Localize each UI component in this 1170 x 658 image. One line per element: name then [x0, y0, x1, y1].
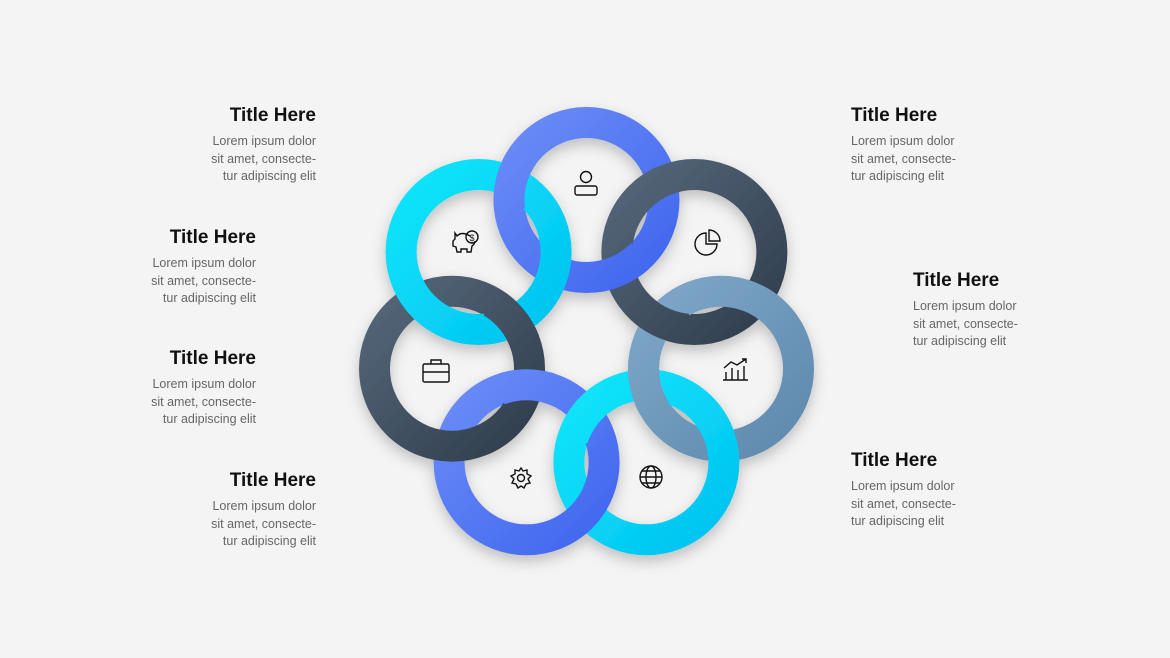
text block: right 2: sit amet, consecte- — [913, 317, 1018, 331]
icon: globe — [640, 466, 662, 488]
text block: left 1: Lorem ipsum dolor — [212, 134, 316, 148]
text block: left 3: sit amet, consecte- — [151, 395, 256, 409]
text block: right 3: Lorem ipsum dolor — [851, 479, 955, 493]
text block: left 4 — [211, 470, 316, 548]
icon: briefcase — [423, 360, 449, 382]
text block: left 3: Lorem ipsum dolor — [152, 377, 256, 391]
text block: right 1: tur adipiscing elit — [851, 169, 944, 183]
text block: left 3 — [151, 348, 256, 426]
text block: left 4: sit amet, consecte- — [211, 517, 316, 531]
text block: right 3: sit amet, consecte- — [851, 497, 956, 511]
text block: left 1: sit amet, consecte- — [211, 152, 316, 166]
ring 1 — [509, 122, 664, 278]
text block: left 3: tur adipiscing elit — [163, 412, 256, 426]
text block: right 3 — [851, 450, 956, 528]
ring 6 — [374, 291, 530, 446]
ring 7 — [401, 174, 556, 330]
text block: left 4: Title Here — [230, 470, 316, 491]
text block: left 1: Title Here — [230, 105, 316, 126]
text block: right 2: Title Here — [913, 270, 999, 291]
text block: right 1 — [851, 105, 956, 183]
text block: left 3: Title Here — [170, 348, 256, 369]
icon: pie chart — [695, 230, 720, 255]
text block: left 4: Lorem ipsum dolor — [212, 499, 316, 513]
text block: left 2 — [151, 227, 256, 305]
text block: right 3: tur adipiscing elit — [851, 514, 944, 528]
chart: interlocking rings — [352, 106, 820, 568]
text block: left 2: sit amet, consecte- — [151, 274, 256, 288]
ring 2 — [617, 174, 772, 330]
icon: piggy bank — [453, 231, 478, 252]
ring 4 — [569, 385, 724, 540]
text block: left 2: Lorem ipsum dolor — [152, 256, 256, 270]
text block: left 2: Title Here — [170, 227, 256, 248]
text block: right 1: Title Here — [851, 105, 937, 126]
text block: right 2: tur adipiscing elit — [913, 334, 1006, 348]
text block: left 1: tur adipiscing elit — [223, 169, 316, 183]
icon: gear — [511, 468, 531, 488]
ring 5 — [449, 385, 604, 540]
ring 3 — [644, 291, 798, 446]
icon: bar chart — [723, 359, 748, 380]
text block: right 1: sit amet, consecte- — [851, 152, 956, 166]
icon: person — [575, 172, 597, 195]
text block: right 3: Title Here — [851, 450, 937, 471]
text block: left 4: tur adipiscing elit — [223, 534, 316, 548]
text block: right 2 — [913, 270, 1018, 348]
icon: piggy bank: $ — [469, 233, 475, 243]
text block: right 1: Lorem ipsum dolor — [851, 134, 955, 148]
text block: left 2: tur adipiscing elit — [163, 291, 256, 305]
text block: left 1 — [211, 105, 316, 183]
text block: right 2: Lorem ipsum dolor — [913, 299, 1017, 313]
